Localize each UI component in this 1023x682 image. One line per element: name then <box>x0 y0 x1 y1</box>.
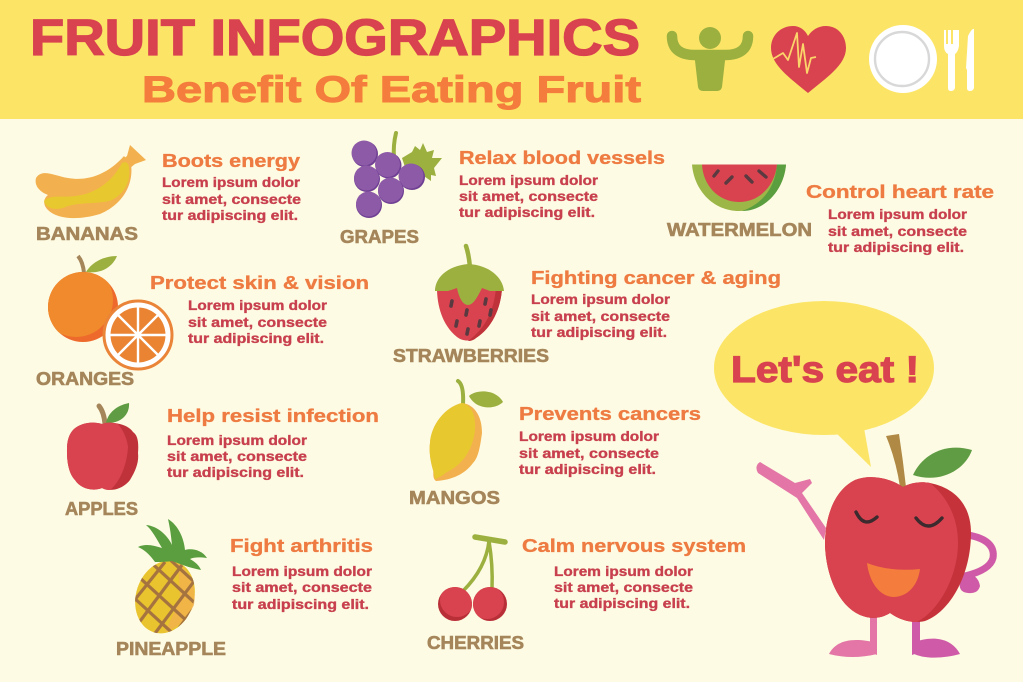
heading: boots energy: Boots energy <box>162 150 301 171</box>
label: oranges: ORANGES <box>36 369 134 389</box>
text: cherries body <box>554 564 694 611</box>
label: apples: APPLES <box>65 499 138 519</box>
text: cherries body: Lorem ipsum dolor <box>554 564 694 579</box>
label: grapes: GRAPES <box>340 227 419 247</box>
panel: bananas <box>36 145 302 244</box>
label: mangos: MANGOS <box>409 488 500 508</box>
heading: relax blood vessels: Relax blood vessels <box>459 147 665 168</box>
text: strawberries body: tur adipiscing elit. <box>531 325 667 340</box>
label: pineapple: PINEAPPLE <box>116 639 226 659</box>
text: watermelon body: sit amet, consecte <box>828 224 968 239</box>
text: bananas body: sit amet, consecte <box>162 192 302 207</box>
label: watermelon: WATERMELON <box>667 220 812 240</box>
callout text: Let's eat ! <box>731 349 919 390</box>
label: strawberries: STRAWBERRIES <box>393 346 549 366</box>
text: apples body: tur adipiscing elit. <box>167 465 304 480</box>
text: apples body: Lorem ipsum dolor <box>167 433 308 448</box>
heading: help resist infection: Help resist infection <box>167 405 379 426</box>
legs and feet <box>870 612 877 655</box>
mouth <box>867 563 920 597</box>
icon: watermelon <box>692 164 786 211</box>
icon: pineapple <box>135 519 207 634</box>
text: mangos body: tur adipiscing elit. <box>519 462 656 477</box>
heading: fighting cancer and aging: Fighting cancer & aging <box>531 267 781 288</box>
text: oranges body: tur adipiscing elit. <box>188 331 324 346</box>
text: bananas body: tur adipiscing elit. <box>162 208 298 223</box>
text: apples body <box>167 433 308 480</box>
text: cherries body: tur adipiscing elit. <box>554 596 690 611</box>
left arm <box>756 462 826 540</box>
panel: apples <box>65 403 379 519</box>
text: grapes body: Lorem ipsum dolor <box>459 173 599 188</box>
icon: mango <box>430 381 503 481</box>
text: bananas body <box>162 175 302 223</box>
text: pineapple body: Lorem ipsum dolor <box>232 564 373 579</box>
text: strawberries body <box>531 292 671 340</box>
text: watermelon body: Lorem ipsum dolor <box>828 207 968 222</box>
text: grapes body <box>459 173 599 220</box>
text: strawberries body: Lorem ipsum dolor <box>531 292 671 307</box>
icon: apple <box>67 403 138 490</box>
heading: prevents cancers: Prevents cancers <box>519 403 701 424</box>
title: FRUIT INFOGRAPHICS <box>30 9 640 66</box>
icon: bananas <box>36 145 146 218</box>
text: strawberries body: sit amet, consecte <box>531 309 671 324</box>
label: bananas: BANANAS <box>36 224 138 244</box>
text: oranges body: Lorem ipsum dolor <box>188 298 328 313</box>
text: watermelon body: tur adipiscing elit. <box>828 240 964 255</box>
label: cherries: CHERRIES <box>427 633 524 653</box>
icon: cherries <box>438 537 507 621</box>
text: watermelon body <box>828 207 968 255</box>
text: pineapple body: tur adipiscing elit. <box>232 597 369 612</box>
header band <box>0 0 1023 119</box>
callout: speech bubble <box>714 301 934 467</box>
panel: grapes <box>340 133 665 247</box>
right arm <box>965 535 993 576</box>
panel: strawberries <box>393 246 781 366</box>
character: apple mascot <box>756 434 993 658</box>
text: grapes body: sit amet, consecte <box>459 189 599 204</box>
panel: oranges <box>36 256 369 389</box>
heading: protect skin and vision: Protect skin & vision <box>150 272 369 293</box>
text: oranges body <box>188 298 328 346</box>
panel: watermelon <box>667 164 994 255</box>
icon: strong person <box>672 27 748 91</box>
icon: plate <box>869 25 937 93</box>
icon: heart with pulse <box>771 26 846 93</box>
leaf <box>913 448 972 478</box>
stem <box>886 434 906 487</box>
text: bananas body: Lorem ipsum dolor <box>162 175 301 190</box>
icon: grapes <box>352 133 442 218</box>
panel: cherries <box>427 535 746 653</box>
text: mangos body <box>519 429 660 477</box>
subtitle: Benefit Of Eating Fruit <box>142 69 641 110</box>
panel: mangos <box>409 381 701 508</box>
icon: oranges <box>39 256 172 369</box>
text: apples body: sit amet, consecte <box>167 449 308 464</box>
panel: pineapple <box>116 519 373 659</box>
eyes <box>856 512 942 526</box>
heading: control heart rate: Control heart rate <box>806 181 994 202</box>
icon: strawberry <box>435 246 504 341</box>
heading: fight arthritis: Fight arthritis <box>230 535 373 556</box>
text: mangos body: Lorem ipsum dolor <box>519 429 660 444</box>
text: grapes body: tur adipiscing elit. <box>459 205 595 220</box>
icon: fork and knife <box>944 29 974 91</box>
text: pineapple body: sit amet, consecte <box>232 580 373 595</box>
text: mangos body: sit amet, consecte <box>519 446 660 461</box>
apple body <box>825 477 971 622</box>
text: pineapple body <box>232 564 373 612</box>
text: oranges body: sit amet, consecte <box>188 315 328 330</box>
text: cherries body: sit amet, consecte <box>554 580 694 595</box>
heading: calm nervous system: Calm nervous system <box>522 535 746 556</box>
